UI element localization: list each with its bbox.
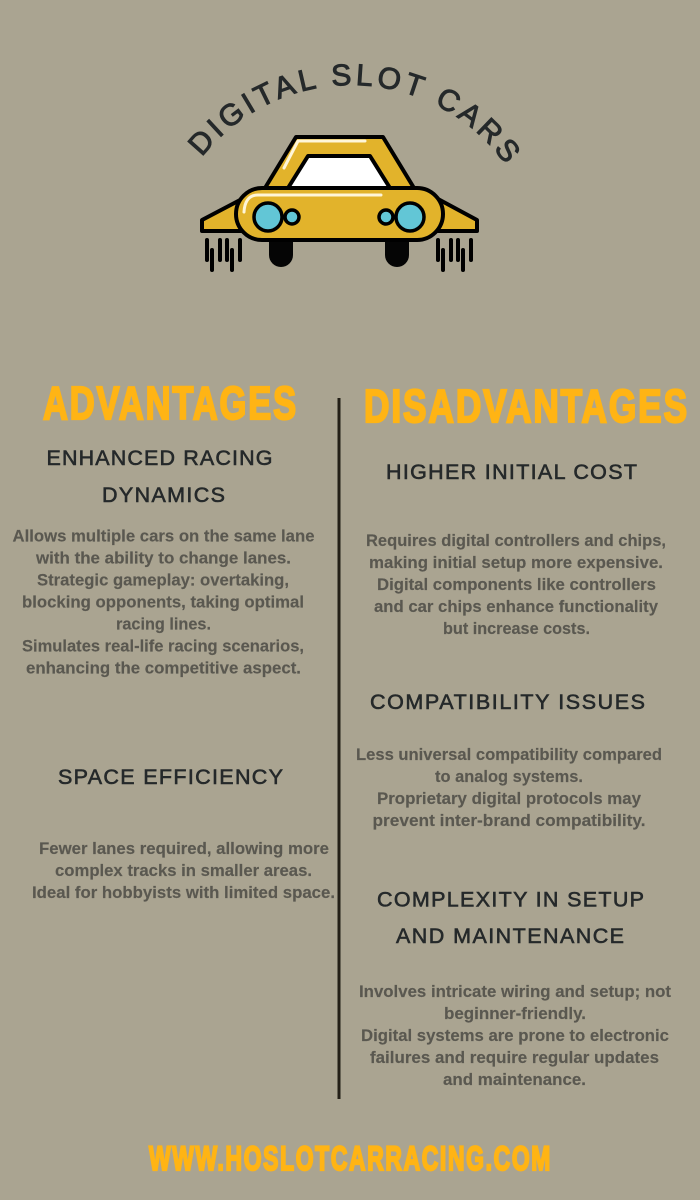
panel: compatibility issues bbox=[356, 690, 662, 830]
panel: higher initial cost bbox=[366, 460, 666, 638]
heading: advantages: ADVANTAGES bbox=[43, 377, 298, 429]
headlights bbox=[254, 203, 424, 231]
body text: Fewer lanes required, allowing more bbox=[39, 840, 329, 858]
body text: Proprietary digital protocols may bbox=[377, 790, 642, 808]
roof bbox=[265, 137, 414, 188]
body text: Strategic gameplay: overtaking, bbox=[37, 572, 289, 590]
subheading bbox=[46, 446, 272, 507]
body text bbox=[359, 983, 672, 1089]
body text: Allows multiple cars on the same lane bbox=[12, 528, 314, 546]
body text: complex tracks in smaller areas. bbox=[55, 862, 312, 880]
body text: to analog systems. bbox=[435, 768, 583, 786]
subheading bbox=[377, 888, 644, 948]
body text: Ideal for hobbyists with limited space. bbox=[32, 884, 335, 902]
body text bbox=[12, 528, 314, 678]
windscreen bbox=[288, 156, 390, 188]
icon: yellow car bbox=[202, 137, 477, 270]
subheading: ENHANCED RACING bbox=[46, 446, 272, 470]
body text: with the ability to change lanes. bbox=[35, 550, 291, 568]
panel: complexity in setup and maintenance bbox=[359, 888, 672, 1089]
body text bbox=[32, 840, 335, 902]
side wings bbox=[202, 199, 477, 231]
body text: Requires digital controllers and chips, bbox=[366, 532, 666, 550]
subheading: AND MAINTENANCE bbox=[396, 924, 624, 948]
body text: Simulates real-life racing scenarios, bbox=[22, 638, 304, 656]
body text bbox=[356, 746, 662, 830]
body text: and maintenance. bbox=[443, 1071, 586, 1089]
roof highlight bbox=[284, 141, 365, 168]
body text: enhancing the competitive aspect. bbox=[26, 660, 301, 678]
column divider bbox=[338, 398, 340, 1099]
speed lines bbox=[207, 240, 471, 270]
car body bbox=[236, 188, 443, 240]
body highlight bbox=[244, 195, 381, 212]
body text: Digital systems are prone to electronic bbox=[361, 1027, 669, 1045]
body text: and car chips enhance functionality bbox=[374, 598, 659, 616]
body text: Involves intricate wiring and setup; not bbox=[359, 983, 672, 1001]
body text: blocking opponents, taking optimal bbox=[22, 594, 304, 612]
body text: racing lines. bbox=[116, 616, 211, 634]
panel: enhanced racing dynamics bbox=[12, 446, 314, 678]
title: DIGITAL SLOT CARS bbox=[187, 64, 520, 162]
panel: space efficiency bbox=[32, 765, 335, 902]
body text: but increase costs. bbox=[443, 620, 590, 638]
body text: prevent inter-brand compatibility. bbox=[372, 812, 646, 830]
wheels bbox=[269, 238, 409, 267]
body text: beginner-friendly. bbox=[444, 1005, 586, 1023]
subheading: DYNAMICS bbox=[102, 483, 225, 507]
body text bbox=[366, 532, 666, 638]
body text: Less universal compatibility compared bbox=[356, 746, 662, 764]
subheading: SPACE EFFICIENCY bbox=[58, 765, 283, 789]
body text: Digital components like controllers bbox=[377, 576, 656, 594]
subheading: COMPATIBILITY ISSUES bbox=[370, 690, 645, 714]
subheading: COMPLEXITY IN SETUP bbox=[377, 888, 644, 912]
body text: failures and require regular updates bbox=[370, 1049, 659, 1067]
body text: making initial setup more expensive. bbox=[369, 554, 663, 572]
subheading: HIGHER INITIAL COST bbox=[386, 460, 637, 484]
